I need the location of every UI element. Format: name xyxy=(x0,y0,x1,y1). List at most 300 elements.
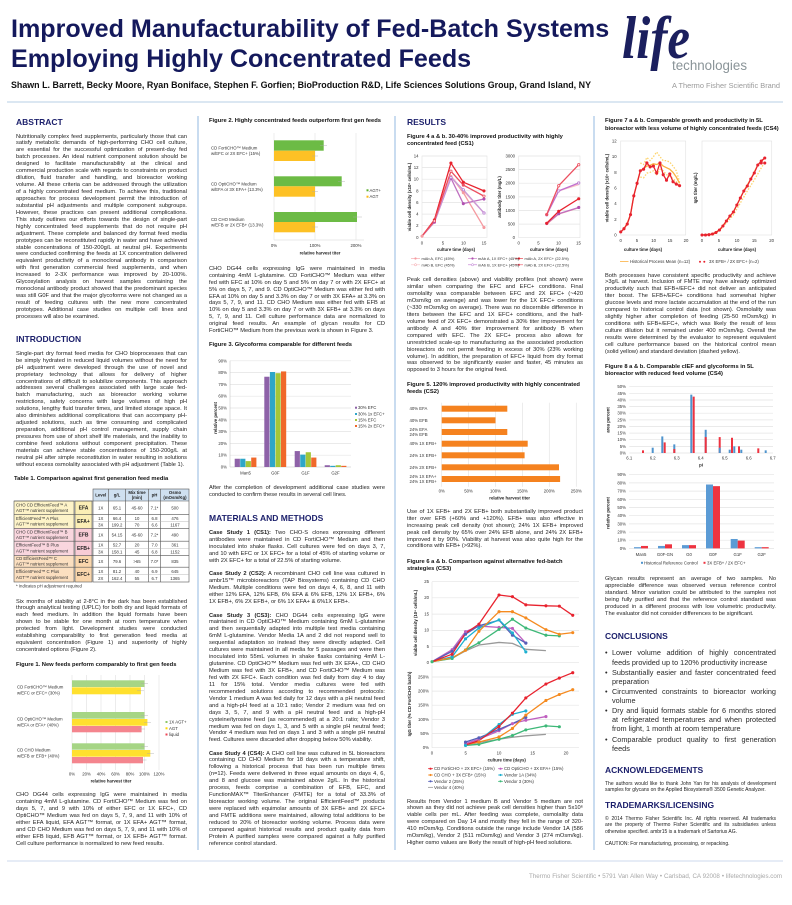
authors: Shawn L. Barrett, Becky Moore, Ryan Boniface, Stephen F. Gorfien; BioProduction R&D, Life Sciences Solutions Group, Grand Island, NY xyxy=(11,80,591,90)
text: abstract: were conducted confirming the feeds at 1X concentration delivered xyxy=(16,251,187,257)
table 1: feed media comparison: 52.7 xyxy=(113,542,122,548)
chart: figure 4a viable cell density: viable cell density (x10⁵ cells/mL) xyxy=(407,162,412,231)
table 1: feed media comparison: 3X xyxy=(98,522,103,528)
heading: figure 6: Figure 6 a & b. Comparison against alternative fed-batch xyxy=(407,559,563,565)
text: abstract xyxy=(16,134,188,320)
chart: figure 8b glycoforms: 0% xyxy=(620,546,626,551)
text: figure 4 results: (~330 mOsm/kg on average). There was no discernible difference in xyxy=(407,305,583,311)
chart: figure 6b IgG titer: 15 xyxy=(530,750,536,756)
text: trademarks: © 2014 Thermo Fisher Scientific Inc. All rights reserved. All trademarks xyxy=(605,816,776,822)
chart: figure 2 bar chart: AGT+ xyxy=(370,188,381,193)
table 1: feed media comparison: 1365 xyxy=(170,576,180,581)
chart: figure 2 bar chart: CD OptiCHO™ Medium xyxy=(211,182,257,186)
text: introduction: be simply hydrated in reduced liquid volumes without the need for xyxy=(16,358,187,364)
text: case study 3: days 3, 5, 7, and 9 with a pH neutral feed and a high-pH xyxy=(209,710,385,716)
text: figure 7 results: slightly higher after completion of feeding (25-50 mOsm/kg) in xyxy=(605,314,776,320)
legend: figure 4 xyxy=(411,256,570,267)
chart: figure 4b antibody titer: 15 xyxy=(576,240,581,246)
chart: figure 7a viable cell density: 10 xyxy=(612,154,617,159)
text: figure 4 results: bioreactors do not permit feeding in excess of 30% (23% working xyxy=(407,347,583,353)
footer: Thermo Fisher Scientific • 5791 Van Allen Way • Carlsbad, CA 92008 • lifetechnologies.com xyxy=(529,873,782,880)
text: figure 4 results: unrestricted scale-up to manufacturing as the associated production xyxy=(407,340,583,346)
text: figure 7 results: compared to historical control data (not shown). Osmolality was xyxy=(605,307,776,313)
text: case study 4: reference control standard. xyxy=(209,841,277,847)
table 1: feed media comparison: AGT™ nutrient supplement xyxy=(16,575,69,580)
chart: figure 4b antibody titer: antibody titer (mg/L) xyxy=(497,176,502,218)
chart: figure 8b glycoforms: 80% xyxy=(617,480,626,485)
chart: figure 6a viable cell density: 0 xyxy=(427,660,430,665)
chart: figure 5 bar chart: 250% xyxy=(571,488,582,493)
chart: figure 2 bar chart: w/EFB or 2X EFB+ (13.3%) xyxy=(211,222,264,228)
text: abstract: result of feeding cultures with the new more concentrated xyxy=(16,300,187,306)
chart: figure 8b glycoforms: 30% xyxy=(617,521,626,526)
table 1: feed media comparison: 45 xyxy=(135,550,140,554)
text: stability: through analytical testing (UPLC) for both dry and liquid formats of xyxy=(16,605,187,611)
text: case study lead-in: After the completion of development additional case studies were xyxy=(209,485,385,491)
chart: figure 6b IgG titer: culture time (days) xyxy=(488,758,526,762)
table 1: feed media comparison: 79.6 xyxy=(113,559,122,564)
text: stability: establishing comparability to first generation feed media at xyxy=(16,633,187,639)
text: figure 7 results: cell culture performance based on the historical control mean xyxy=(605,342,776,348)
chart: figure 1 bar chart: w/EFA or EFA+ (40%) xyxy=(17,722,59,728)
text: case study 4: reduced to 20% of bioreactor working volume. Process data were xyxy=(209,820,385,826)
text: trademarks: are the property of Thermo Fisher Scientific and its subsidiaries unless xyxy=(605,822,776,828)
table 1: feed media comparison: 6.6 xyxy=(152,522,158,528)
text: figure 2 description: FortiCHO™ Medium from the previous work is shown in Figure 3. xyxy=(209,328,373,334)
text: glycan results: standard. Minor variation could be attributed to the samples not xyxy=(605,590,776,596)
text: figure 4 results: osmolality was comparable between EFC and 2X EFC+ (~420 xyxy=(407,291,583,297)
legend: figure 6 xyxy=(428,766,564,790)
text: case study 3: cysteine/tyrosine feed (as recommended) at a 20:1 ratio; Vendor 3 xyxy=(209,717,385,723)
text: case study 2 xyxy=(209,571,385,605)
chart: figure 1 bar chart: w/EFB or EFB+ (40%) xyxy=(17,754,60,758)
chart: figure 2 bar chart xyxy=(211,133,381,256)
table 1: feed media comparison: CHO CD EfficientFeed™ A xyxy=(16,502,67,508)
text: abstract: However, these practices can present additional complications. xyxy=(16,210,187,216)
chart: figure 4b antibody titer: 0 xyxy=(518,240,521,246)
chart: figure 4b antibody titer: culture time (days) xyxy=(530,247,569,252)
chart: figure 8a cIEF: area percent xyxy=(606,407,610,433)
text: glycan results: Glycan results represent an average of two samples. No xyxy=(605,576,776,582)
chart: figure 6b IgG titer: 100% xyxy=(418,717,429,722)
text: case study 3: inoculated into 55mL volumes in shake flasks containing 4mM L- xyxy=(209,654,385,660)
chart: figure 4a viable cell density: 4 xyxy=(416,212,419,217)
chart: figure 7a viable cell density: 2 xyxy=(614,217,617,222)
chart: figure 6a viable cell density: 25 xyxy=(424,579,430,584)
chart: figure 6b IgG titer: 0 xyxy=(431,750,434,756)
chart: figure 2 bar chart: w/EFA or 3X EFA+ (13.3%) xyxy=(211,187,263,192)
chart: figure 8a cIEF xyxy=(606,384,776,468)
chart: figure 8b glycoforms: 20% xyxy=(617,530,626,535)
text: case study 3: 11 for 15% total. Vendor media cultures were fed with xyxy=(209,682,385,688)
text: figure 4 results xyxy=(407,277,583,373)
text: introduction: proprietary technology that allows for delivery of higher xyxy=(16,372,187,378)
text: figure 6 results: were compared on Day 14 and mostly they fell in the range of 320- xyxy=(407,819,583,825)
chart: figure 8b glycoforms: 70% xyxy=(617,489,626,494)
heading: figure 7 xyxy=(605,118,779,132)
chart: figure 4a viable cell density: 12 xyxy=(414,165,419,170)
text: abstract: of a highly concentrated feed medium. To achieve this, traditional xyxy=(16,189,187,195)
chart: figure 7b IgG titer: culture time (days) xyxy=(718,247,757,252)
table 1: feed media comparison: 66.4 xyxy=(113,516,122,521)
text: acknowledgements: samples for glycans on the Applied Biosystems® 3500 Genetic Analyzer. xyxy=(605,787,766,793)
table 1: feed media comparison: 361 xyxy=(171,542,179,548)
text: case study 1: with 2X EFC+ for a total of 22.5% of starting volume. xyxy=(209,558,341,564)
chart: figure 1 bar chart: CD CHO Medium xyxy=(17,748,51,752)
legend: figure 6: Vendor 1A (34%) xyxy=(504,772,537,778)
chart: figure 6b IgG titer: 50% xyxy=(420,731,429,736)
chart: figure 5 bar chart: 40% EFA xyxy=(410,406,428,411)
text: case study 4: containing CD CHO Medium for 18 days with a temperature shift, xyxy=(209,757,385,763)
table 1: feed media comparison: 500 xyxy=(171,506,179,510)
chart: figure 6a viable cell density: 10 xyxy=(424,628,430,633)
list: conclusions: Lower volume addition of highly concentrated xyxy=(612,648,776,657)
text: case study 3: cultures were maintained in all media for 5 passages and were then xyxy=(209,647,385,653)
heading: figure 8: Figure 8 a & b. Comparable cIEF and glycoforms in 5L xyxy=(605,364,754,370)
text: figure 2 description: days 5, 7, 9, and 11. CD CHO Medium was either fed with EFB at xyxy=(209,300,385,306)
text: abstract: adjustment. These complete and balanced dry format feed media xyxy=(16,231,187,237)
chart: figure 5 bar chart xyxy=(410,402,582,500)
text: case study 3: Case Study 3 (CS3): CHO DG44 cells expressing IgG were xyxy=(209,612,385,618)
chart: figure 4a viable cell density: 10 xyxy=(414,177,419,182)
chart: figure 1 bar chart: 120% xyxy=(154,772,165,776)
chart: figure 4a viable cell density: 2 xyxy=(416,223,419,228)
table 1: feed media comparison: 54.15 xyxy=(112,532,123,538)
chart: figure 7a viable cell density: 8 xyxy=(614,170,617,175)
text: case study 4: Case Study 4 (CS4): A CHO cell line was cultured in 5L bioreactors xyxy=(209,750,385,756)
table 1: feed media comparison: 1X xyxy=(98,532,103,538)
chart: figure 4a viable cell density: 10 xyxy=(461,240,466,246)
chart: figure 4b antibody titer: 0 xyxy=(513,235,516,240)
chart: figure 6b IgG titer: 150% xyxy=(418,703,429,708)
text: stability: shown to be stable for one month at room temperature when xyxy=(16,619,187,625)
table 1: feed media comparison: 1X xyxy=(98,569,103,574)
heading: figure 7: bioreactor with less volume of highly concentrated feeds (CS4) xyxy=(605,126,779,132)
heading: figure 5: Figure 5. 120% improved productivity with highly concentrated xyxy=(407,382,580,388)
table 1: feed media comparison: EFC+ xyxy=(77,572,90,578)
heading: acknowledgements: ACKNOWLEDGEMENTS xyxy=(605,765,703,775)
text: abstract: designed to facilitate manufacturability at the clinical and xyxy=(16,161,187,167)
chart: figure 7a viable cell density: 10 xyxy=(651,238,657,243)
text: figure 5 results: increasing peak cell density (not shown); 24% 1X EFB+ improved xyxy=(407,523,583,529)
text: case study 4: (n=12). Feeds were delivered in three equal amounts on days 4, 6, xyxy=(209,771,385,777)
heading: results: RESULTS xyxy=(407,117,446,127)
table 1: feed media comparison: CHO CD EfficientFeed™ B xyxy=(16,530,68,534)
table 1: feed media comparison: 1167 xyxy=(170,522,180,528)
text: abstract: satisfy metabolic demands of high-performing CHO cell culture, xyxy=(16,140,187,146)
chart: figure 3 glycoforms bar chart: 0% xyxy=(221,464,227,470)
text: figure 6 results: Results from Vendor 1 medium B and Vendor 5 medium are not xyxy=(407,798,583,804)
chart: figure 2 bar chart: 100% xyxy=(310,243,321,248)
table 1: feed media comparison: pH xyxy=(152,492,157,498)
chart: figure 8b glycoforms: G0F xyxy=(709,552,718,557)
list: conclusions: Dry and liquid formats stable for 6 months stored xyxy=(612,706,776,715)
heading: figure 8 xyxy=(605,364,754,377)
text: figure 5 results: improved it by 90%. Viability at harvest was also quite high for the xyxy=(407,537,583,543)
legend: figure 7: Historical Process Mean (n=12) xyxy=(630,259,691,264)
list: conclusions: Circumvented constraints to bioreactor working xyxy=(612,687,776,696)
text: abstract: was still G0F and that the major glycoforms were not changed as a xyxy=(16,293,187,299)
text: trademarks: otherwise specified. ambr15 is a trademark of Sartorius AG. xyxy=(605,829,737,835)
heading: trademarks/licensing: TRADEMARKS/LICENSING xyxy=(605,800,714,810)
text: case study 1 xyxy=(209,530,385,564)
chart: figure 7a viable cell density: culture time (days) xyxy=(624,247,663,252)
chart: figure 7a viable cell density: 5 xyxy=(636,238,639,243)
logo: life technologies: technologies xyxy=(672,58,747,73)
chart: figure 8a cIEF: 6.6 xyxy=(746,456,752,460)
chart: figure 4a viable cell density: 0 xyxy=(416,235,419,240)
chart: figure 4a viable cell density: 0 xyxy=(421,240,424,246)
text: figure 5 results xyxy=(407,509,583,549)
chart: figure 1 bar chart: CD FortiCHO™ Medium xyxy=(17,684,64,690)
text: figure 5 results: Use of 1X EFB+ and 2X EFB+ both substantially improved product xyxy=(407,509,583,515)
text: figure 1 description: Cell culture performance is normalized to new feed results. xyxy=(16,841,164,847)
table 1: feed media comparison: 490 xyxy=(171,532,179,538)
heading: abstract: ABSTRACT xyxy=(16,117,63,127)
chart: figure 8a cIEF: 45% xyxy=(617,391,626,396)
table 1: feed media comparison: 645 xyxy=(171,569,179,574)
table 1: feed media comparison: * Indicates pH adjustment required xyxy=(16,584,83,588)
chart: figure 8a cIEF: 0% xyxy=(620,450,626,456)
list: conclusions xyxy=(605,648,776,753)
chart: figure 3 glycoforms bar chart: 20% xyxy=(218,441,227,446)
text: case study 3: feed. Cultures were discarded after dropping below 50% viability. xyxy=(209,737,372,743)
text: figure 4 results: Peak cell densities (above) and viability profiles (not shown) were xyxy=(407,277,583,283)
heading: table 1: Table 1. Comparison against first generation feed media xyxy=(14,476,168,482)
table 1: feed media comparison: EfficientFeed™ A Plus xyxy=(16,516,58,521)
text: figure 2 description: CHO DG44 cells expressing IgG were maintained in media xyxy=(209,266,385,272)
text: case study 3: fed with 2X EFC+. Each condition was fed daily from day 4 to day xyxy=(209,675,385,681)
table 1: feed media comparison: g/L xyxy=(114,492,121,498)
chart: figure 3 glycoforms bar chart: relative percent xyxy=(213,402,218,434)
text: case study 4: were replaced with equimolar amounts of 3X EFB+ and 2X EFC+ xyxy=(209,806,385,812)
chart: figure 8b glycoforms: Man5 xyxy=(636,552,647,557)
chart: figure 7a viable cell density: 20 xyxy=(684,238,689,243)
chart: figure 8a cIEF: 25% xyxy=(617,417,626,422)
chart: figure 7b IgG titer xyxy=(693,141,775,252)
panel: column 2 figures and materials and methods xyxy=(209,118,386,847)
text: figure 2 description: 10% on day 5 and 3.3% on day 7 or with 3X EFB+ at 3.3% on days xyxy=(209,307,385,313)
title: Employing Highly Concentrated Feeds xyxy=(11,45,471,73)
text: figure 2 description: fed with EFC at 10% on day 5 and 5% on day 7 or with 2X EFC+ at xyxy=(209,280,385,286)
chart: figure 8a cIEF: 6.7 xyxy=(770,456,776,460)
text: case study 1: Case Study 1 (CS1): Two CHO-S clones expressing different xyxy=(209,530,385,536)
chart: figure 3 glycoforms bar chart: 70% xyxy=(218,382,227,387)
text: figure 1 description: OptiCHO™ Medium was fed on days 5, 7, 9, and 11 with 10% of xyxy=(16,813,187,819)
chart: figure 8a cIEF: 5% xyxy=(620,444,626,449)
table 1: feed media comparison: 6.8 xyxy=(152,516,158,521)
table 1: feed media comparison xyxy=(14,488,190,588)
text: figure 2 description: containing 4mM L-glutamine. CD FortiCHO™ Medium was either xyxy=(209,273,385,279)
heading: figure 5 xyxy=(407,382,580,395)
text: figure 6 results: mOsm/kg), Vendor 2 (511 mOsm/kg) and Vendor 3 (274 mOsm/kg). xyxy=(407,833,583,839)
legend: figure 4: mAb A, EFC (45%) xyxy=(422,256,455,261)
text: abstract: This study outlines our efforts towards the design of single-part xyxy=(16,217,187,223)
chart: figure 1 bar chart: 1X AGT+ xyxy=(169,720,187,724)
panel: column 4 figures, conclusions, acknowledgements xyxy=(604,118,779,847)
text: abstract: prototypes can be reconstituted rapidly in water and have achieved xyxy=(16,238,187,244)
text: figure 4 results: mOsm/kg on average) and was lower for the 1X EFC+ conditions xyxy=(407,298,583,304)
text: figure 6 results: 410 mOsm/kg. Conditions outside the range include Vendor 1A (586 xyxy=(407,826,583,832)
chart: figure 1 bar chart: 40% xyxy=(97,772,105,776)
text: figure 4 results: titers between the EFC and 1X EFC+ conditions, and the half- xyxy=(407,312,583,318)
chart: figure 1 bar chart: w/EFC or EFC+ (30%) xyxy=(17,690,60,696)
text: case study 3: 6mM L-glutamine. Vendor Media 1A and 2 did not respond well to xyxy=(209,633,385,639)
table 1: feed media comparison: 45-60 xyxy=(132,532,143,538)
table 1: feed media comparison: EFB xyxy=(78,532,89,538)
text: figure 7 results: (solid yellow) and standard deviation (dashed yellow). xyxy=(605,349,740,355)
text: figure 6 results: viable cells per mL. After feeding was complete, osmolality data xyxy=(407,812,583,818)
chart: figure 3 glycoforms bar chart: G1F xyxy=(301,470,310,476)
chart: figure 6a viable cell density: viable cell density (10⁶ cells/mL) xyxy=(413,589,418,656)
text: introduction: without excess osmolality associated with pH adjustment (Table 1). xyxy=(16,462,184,468)
chart: figure 1 bar chart: 100% xyxy=(139,772,150,776)
table 1: feed media comparison: EfficientFeed™ C Plus xyxy=(16,569,59,574)
table 1: feed media comparison: Osmo xyxy=(169,490,181,495)
chart: figure 8a cIEF: 20% xyxy=(617,424,626,429)
text: introduction: batch manufacturing, such as bioreactor working volume xyxy=(16,392,187,398)
text: figure 7 results: conditions with EFB+/EFC+, which was likely the result of less xyxy=(605,321,776,327)
legend: figure 6: Vendor 3 (30%) xyxy=(504,779,534,784)
text: case study 1: inoculated into shake flasks. Cell cultures were fed on days 3, 7, xyxy=(209,544,385,550)
chart: figure 6a viable cell density: 5 xyxy=(427,644,430,649)
chart: figure 1 bar chart: AGT xyxy=(169,726,178,731)
table 1: feed media comparison: 7.0 xyxy=(152,542,158,548)
logo: life technologies: life xyxy=(622,5,690,71)
text: case study 4: following a historical process that has been run multiple times xyxy=(209,764,385,770)
chart: figure 1 bar chart: 0% xyxy=(69,772,75,776)
table 1: feed media comparison: 1152 xyxy=(170,550,180,554)
table 1: feed media comparison: EFB+ xyxy=(77,546,90,552)
text: introduction: Single-part dry format feed media for CHO bioprocesses that can xyxy=(16,351,187,357)
text: case study 4: process, feeds comprise a combination of EFB, EFC, and xyxy=(209,785,385,791)
text: figure 1 description: either EFA liquid, EFA AGT™ format, or 1X EFA+ AGT™ format, xyxy=(16,820,187,826)
text: introduction: combine feed solutions without component precipitation. These xyxy=(16,441,187,447)
text: abstract: substantial pH adjustments and multiple component subgroups. xyxy=(16,203,187,209)
text: figure 4 results: similar when comparing the EFC and EFC+ conditions. Final xyxy=(407,284,583,290)
text: abstract: dilution, fluid transfer and handling, and bioreactor working xyxy=(16,175,187,181)
table 1: feed media comparison: 3X xyxy=(98,550,103,554)
chart: figure 3 glycoforms bar chart: 15% EFC xyxy=(358,418,376,422)
logo: life technologies: A Thermo Fisher Scientific Brand xyxy=(672,81,780,90)
text: stability xyxy=(16,598,187,653)
chart: figure 1 bar chart: CD OptiCHO™ Medium xyxy=(17,716,63,722)
text: case study 2: Medium. Multiple conditions were fed on days 4, 6, 8, and 11 with xyxy=(209,585,385,591)
chart: figure 4a viable cell density: 5 xyxy=(442,240,445,246)
text: figure 7 results: productivity such that EFB+/EFC+ did not deliver an anticipated xyxy=(605,286,776,292)
table 1: feed media comparison: 6.7 xyxy=(152,576,158,581)
table 1: feed media comparison: CD EfficientFeed™ C xyxy=(16,556,57,561)
chart: figure 6a viable cell density: 20 xyxy=(424,595,430,600)
table 1: feed media comparison: 10 xyxy=(135,516,140,521)
text: figure 1 description: either EFB liquid, EFB AGT™ format, or 1X EFB+ AGT™ format. xyxy=(16,834,187,840)
chart: figure 4b antibody titer: 3000 xyxy=(505,154,516,158)
chart: figure 5 bar chart: 24% EFB xyxy=(410,432,428,437)
chart: figure 8b glycoforms: G0 xyxy=(686,552,692,557)
chart: figure 2 bar chart: CD FortiCHO™ Medium xyxy=(211,146,258,150)
list: conclusions: feeds xyxy=(612,744,630,753)
text: introduction: solutions, lengthy fluid transfer times, and limited storage space. It xyxy=(16,406,187,412)
chart: figure 3 glycoforms bar chart: 40% xyxy=(218,417,227,422)
list: conclusions: at refrigerated temperatures and when protected xyxy=(612,715,776,724)
chart: figure 8b glycoforms: 10% xyxy=(617,538,626,543)
chart: figure 5 bar chart: 150% xyxy=(517,488,528,493)
legend: figure 4: mAb B, EFC (45%) xyxy=(422,262,455,267)
text: figure 2 description: 5, 7, 9, and 11. Cell culture performance data are normalized to xyxy=(209,314,385,320)
text: figure 7 results: glucose levels and more lactate accumulation at the end of the run xyxy=(605,300,776,306)
text: trademarks xyxy=(605,816,776,835)
text: acknowledgements: The authors would like to thank John Yan for his analysis of development xyxy=(605,781,776,787)
chart: figure 8b glycoforms: 90% xyxy=(617,472,626,477)
chart: figure 6a viable cell density xyxy=(413,579,579,665)
chart: figure 8b glycoforms: relative percent xyxy=(606,497,610,529)
table 1: feed media comparison: 45-60 xyxy=(132,506,143,510)
chart: figure 8a cIEF: 10% xyxy=(617,437,626,442)
chart: figure 8a cIEF: 15% xyxy=(617,431,626,436)
table 1: feed media comparison: 199.2 xyxy=(112,522,123,528)
text: figure 4 results: volume feed of 2X EFC+ demonstrated a 30% titer improvement for xyxy=(407,319,583,325)
chart: figure 8 bar charts xyxy=(606,384,776,565)
text: figure 7 results: results were determined by the evaluator to represent equivalent xyxy=(605,335,776,341)
text: case study 3: Vendor 1 medium A was fed daily for 12 days with a pH neutral feed xyxy=(209,696,385,702)
logo: life technologies xyxy=(622,5,780,90)
text: case study 4: bioreactor working volume. The original EfficientFeed™ products xyxy=(209,799,385,805)
legend: figure 4: mAb A, 1X EFC+ (45%) xyxy=(478,256,520,261)
text: figure 1 description: containing 4mM L-glutamine. CD FortiCHO™ Medium was fed on xyxy=(16,799,187,805)
text: stability: each feed medium. In addition the liquid formats have been xyxy=(16,612,187,618)
chart: figure 3 glycoforms bar chart: 50% xyxy=(218,406,227,410)
chart: figure 4b antibody titer: 500 xyxy=(508,222,516,227)
chart: figure 6b IgG titer: 200% xyxy=(418,689,429,694)
chart: figure 3 glycoforms bar chart: 30% EFC xyxy=(358,405,376,410)
legend: figure 7 xyxy=(620,259,759,264)
chart: figure 7a viable cell density: 12 xyxy=(612,138,617,144)
chart: figure 3 glycoforms bar chart: 30% xyxy=(218,429,227,434)
text: case study 4: and FMTE additions were maintained, allowing total additions to be xyxy=(209,813,385,819)
table 1: feed media comparison: 1X xyxy=(98,542,103,548)
table 1: feed media comparison: 40 xyxy=(135,569,140,574)
heading: figure 2: Figure 2. Highly concentrated feeds outperform first gen feeds xyxy=(209,118,381,124)
text: abstract: volume. All these criteria can be addressed through the utilization xyxy=(16,182,187,188)
panel: column 3 results xyxy=(407,117,584,846)
chart: figure 6 line charts xyxy=(407,579,579,790)
chart: figure 1 bar chart: 20% xyxy=(82,772,91,776)
chart: figure 5 bar chart: 40% 1X EFB+ xyxy=(410,441,437,446)
list: conclusions: feeds provided up to 120% productivity increase xyxy=(612,658,767,667)
text: introduction xyxy=(16,351,187,468)
chart: figure 3 glycoforms bar chart: 30% 1x EFC+ xyxy=(358,412,385,416)
table 1: feed media comparison: 7.1* xyxy=(151,506,159,510)
table 1: feed media comparison: 2X xyxy=(98,576,103,581)
table 1: feed media comparison: 476 xyxy=(171,516,179,521)
text: caution: CAUTION: For manufacturing, processing, or repacking. xyxy=(605,841,730,847)
text: figure 4 results: compared with EFC. The 2X EFC+ process also allows for xyxy=(407,333,583,339)
chart: figure 7a viable cell density: 4 xyxy=(614,201,617,206)
text: figure 5 results: titer over EFB (+60% and +120%). EFB+ was also effective in xyxy=(407,516,583,522)
text: abstract: batch processes. An ideal nutrient component solution should be xyxy=(16,154,187,160)
text: case study 1: antibodies were maintained in CD FortiCHO™ Medium and then xyxy=(209,537,385,543)
heading: figure 6 xyxy=(407,559,563,572)
chart: figure 2 bar chart: relative harvest titer xyxy=(300,250,341,256)
chart: figure 7b IgG titer: 10 xyxy=(735,238,740,243)
text: case study 4: Protein A purified samples were compared against a fully purified xyxy=(209,834,385,840)
text: introduction: adjusted solutions, such as time consuming and complicated xyxy=(16,420,187,426)
chart: figure 8a cIEF: 6.3 xyxy=(674,456,680,460)
table 1: feed media comparison: (min) xyxy=(132,495,143,500)
chart: figure 7a viable cell density: 15 xyxy=(668,238,673,243)
chart: figure 1 bar chart: 80% xyxy=(126,772,134,776)
text: introduction: preparation, additional pH control management, supply chain xyxy=(16,427,187,433)
